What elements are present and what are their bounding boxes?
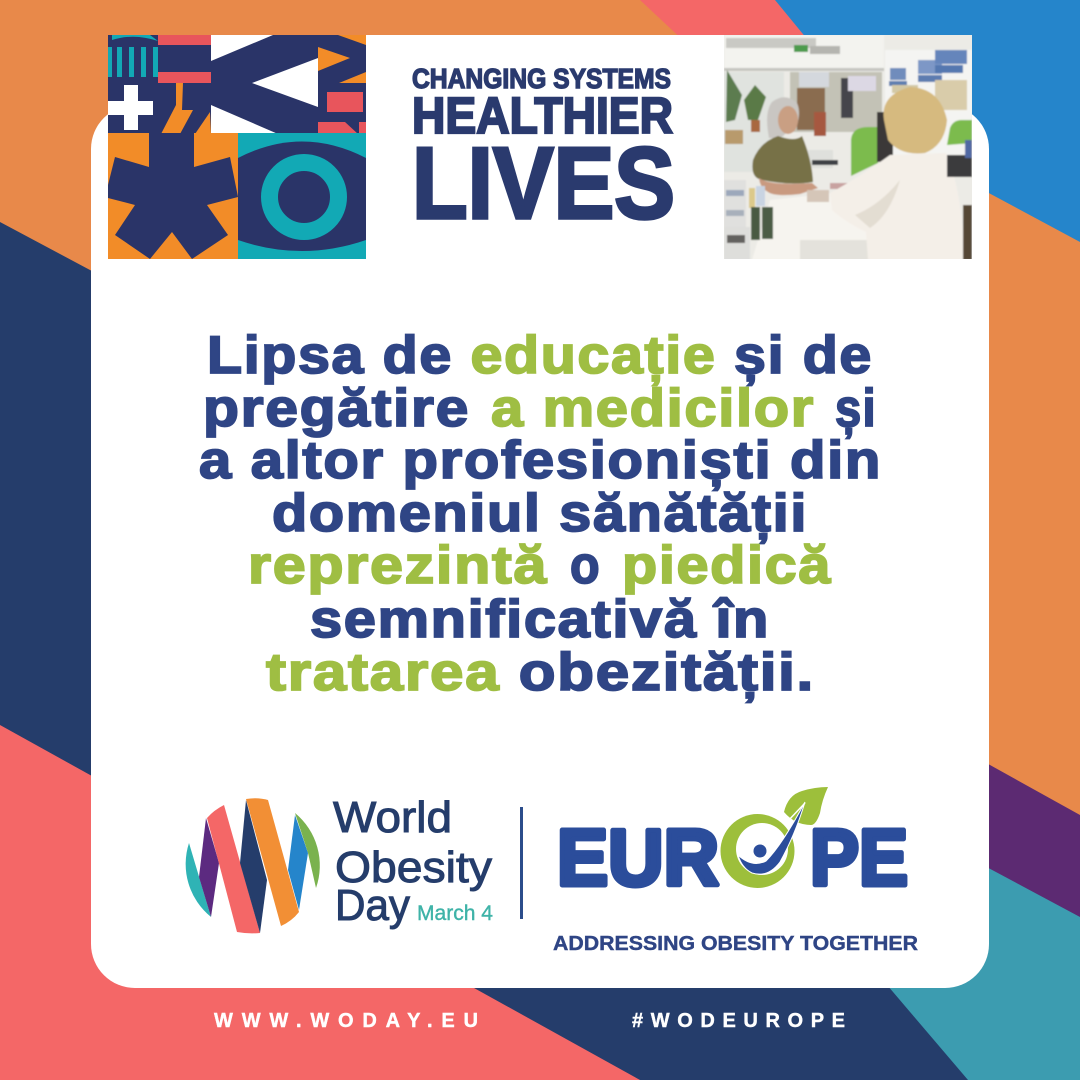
main message: Lipsa de educație și de [207,326,873,386]
white card [91,105,989,988]
World Obesity Day wordmark: March 4 [417,902,493,925]
EUROPE logo [557,787,908,902]
tagline: ADDRESSING OBESITY TOGETHER [553,933,919,955]
campaign title [412,63,675,240]
icon: eye [238,133,366,259]
hashtag: #WODEUROPE [632,1010,845,1032]
campaign title: HEALTHIER [412,87,673,144]
photo: pharmacist and customer at the counter [720,30,980,265]
main message: a medicilor [491,379,815,438]
main message: piedică [622,536,832,595]
counter [752,190,870,260]
main message: pregătire [203,379,470,438]
icon: green ring with leaf and figure [720,787,828,888]
main message: a altor profesioniști din [199,431,882,491]
World Obesity Day wordmark: Day [335,881,410,930]
EUROPE logo: EUR [557,813,719,902]
main message: o [570,536,601,595]
logo divider [520,807,523,919]
main message: tratarea obezității. [266,643,815,703]
pharmacist [830,153,965,260]
World Obesity Day logo mark [186,798,320,933]
campaign title: LIVES [412,128,675,240]
icon mosaic: healthcare pictograms [108,35,366,259]
EUROPE logo: PE [810,813,908,902]
World Obesity Day wordmark: World [333,793,452,842]
main message: domeniul sănătății [272,484,808,544]
World Obesity Day wordmark: Obesity [335,843,492,892]
header white banner [108,35,972,259]
main message: și [835,379,877,439]
campaign title: CHANGING SYSTEMS [412,63,671,94]
icon: white cross [108,85,153,130]
World Obesity Day wordmark [333,793,493,930]
main message: reprezintă [248,536,548,595]
customer [767,97,799,138]
main message: semnificativă în [310,590,770,649]
icon: asterisk star of life [108,133,238,259]
website link: WWW.WODAY.EU [214,1010,478,1032]
main message [199,326,882,703]
